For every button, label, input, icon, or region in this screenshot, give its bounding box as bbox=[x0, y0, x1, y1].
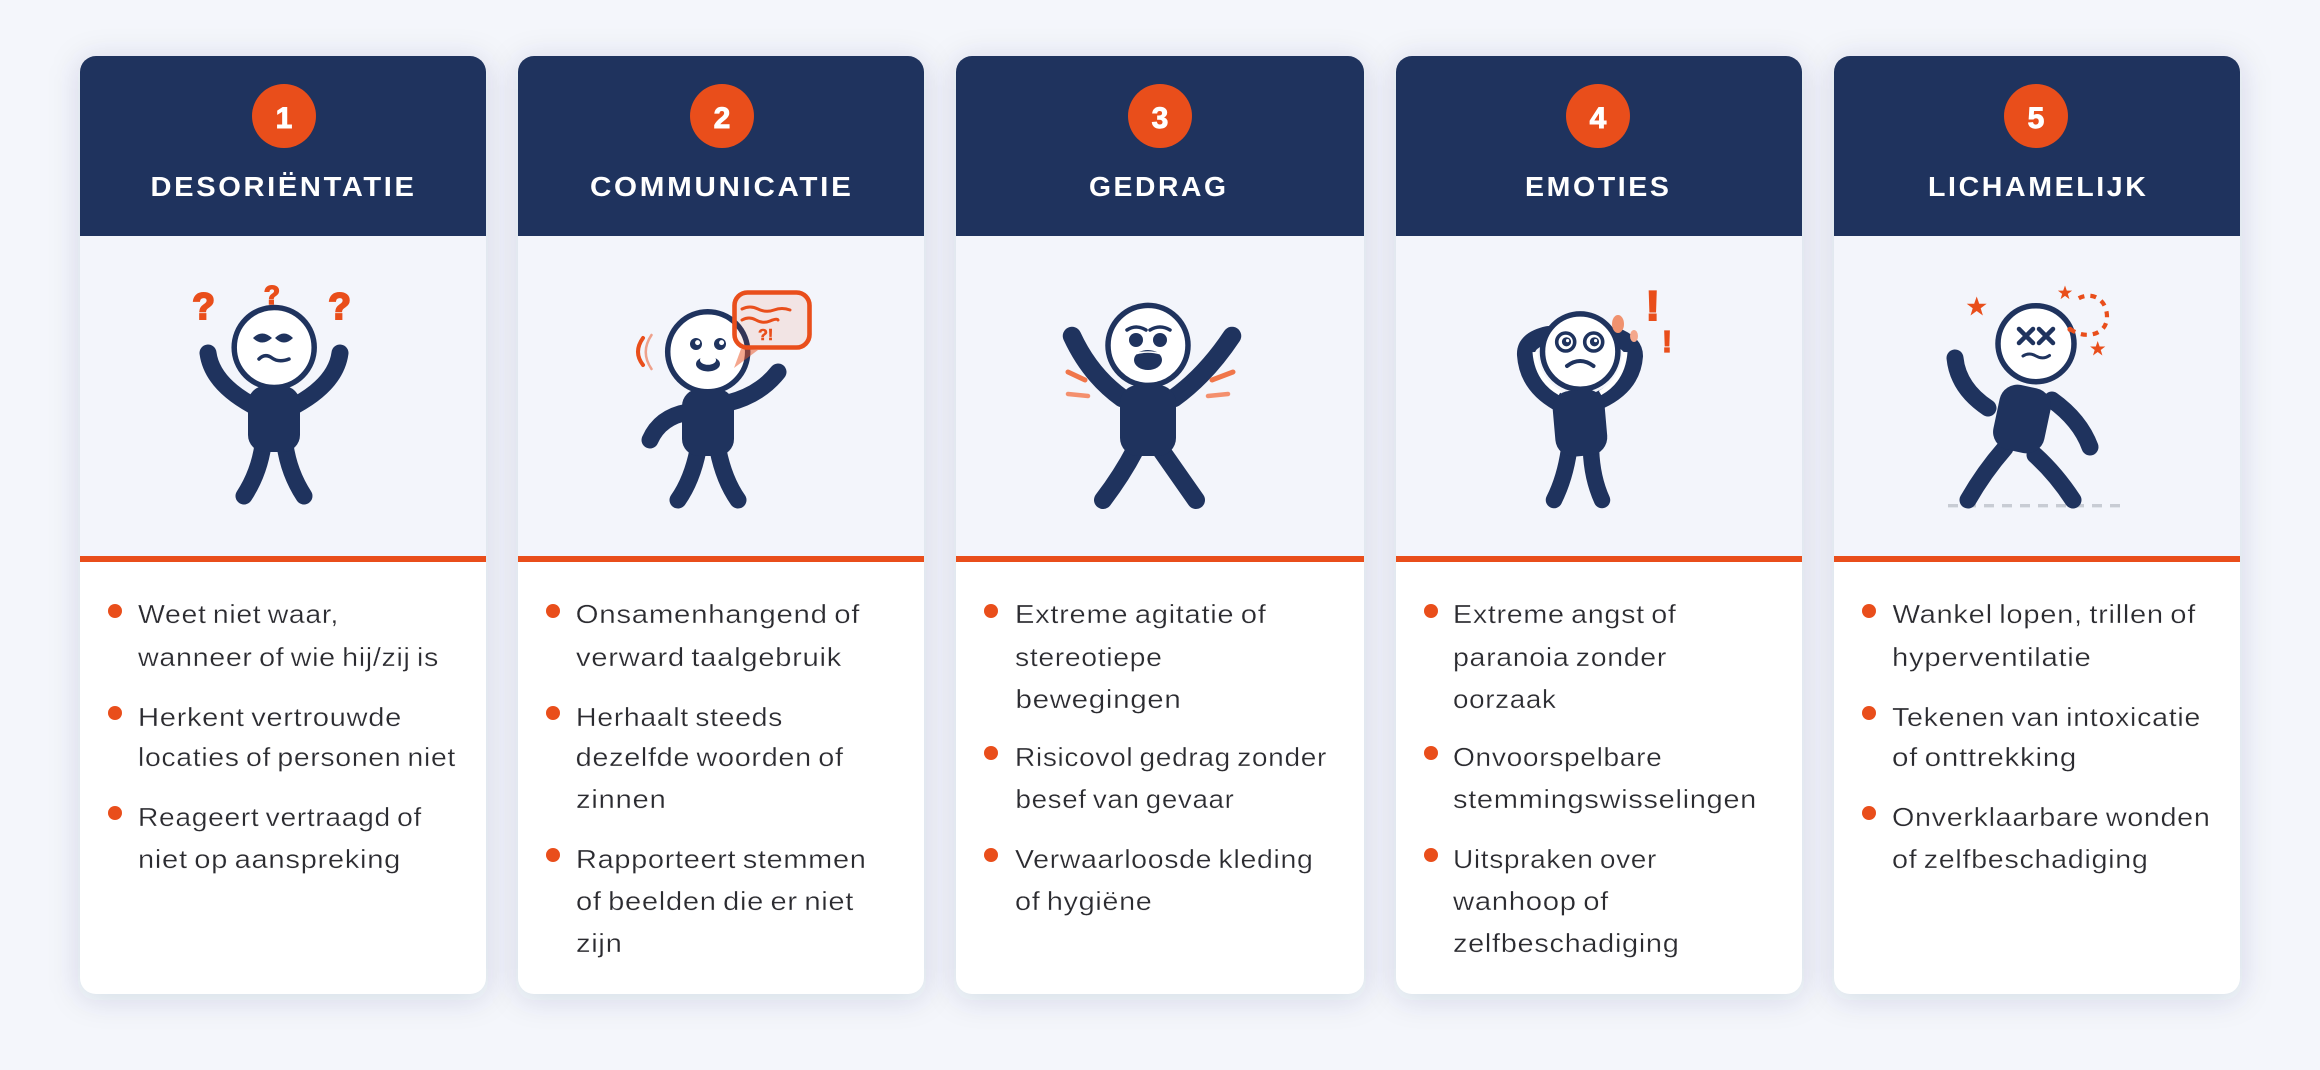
header band 3 bbox=[956, 56, 1364, 236]
bullet list 5: of zelfbeschadiging bbox=[1892, 844, 2148, 874]
bullet list 4 bbox=[1424, 599, 1757, 958]
bullet list 2: Herhaalt steeds bbox=[576, 702, 783, 732]
heading 4: EMOTIES bbox=[1525, 171, 1672, 202]
icon: confused figure with question marks: ? bbox=[264, 280, 280, 310]
bullet list 1: Herkent vertrouwde bbox=[138, 702, 402, 732]
icon: confused figure with question marks: ? bbox=[328, 286, 351, 327]
number badge 4: 4 bbox=[1590, 102, 1607, 135]
heading 3: GEDRAG bbox=[1089, 171, 1228, 202]
bullet list 2: Rapporteert stemmen bbox=[576, 844, 866, 874]
heading 2: COMMUNICATIE bbox=[590, 171, 854, 202]
heading 5: LICHAMELIJK bbox=[1928, 171, 2148, 202]
bullet list 3: stereotiepe bbox=[1015, 642, 1162, 672]
bullet list 2 bbox=[546, 599, 866, 958]
bullet list 3: Risicovol gedrag zonder bbox=[1015, 742, 1327, 772]
bullet list 3: of hygiëne bbox=[1015, 886, 1152, 916]
bullet list 5: of onttrekking bbox=[1892, 742, 2077, 772]
icon: talking figure with speech bubble: ?! bbox=[758, 327, 773, 344]
panel: 4 emoties bbox=[1394, 56, 1804, 1000]
number badge 3: 3 bbox=[1152, 102, 1168, 135]
number badge 3 bbox=[1128, 84, 1192, 148]
icon: anxious figure with hands on head bbox=[1526, 282, 1672, 500]
bullet list 3: besef van gevaar bbox=[1016, 784, 1234, 814]
heading 1: DESORIËNTATIE bbox=[150, 171, 416, 202]
icon: anxious figure with hands on head: ! bbox=[1662, 324, 1672, 359]
header band 2 bbox=[518, 56, 924, 236]
icon: agitated figure with raised arms bbox=[1068, 305, 1233, 500]
icon: dizzy staggering figure with stars bbox=[1948, 286, 2120, 506]
bullet list 3: Verwaarloosde kleding bbox=[1015, 844, 1314, 874]
panel: 3 gedrag bbox=[954, 56, 1366, 1000]
bullet list 1: Reageert vertraagd of bbox=[138, 802, 422, 832]
bullet list 2: dezelfde woorden of bbox=[576, 742, 844, 772]
bullet list 4: paranoia zonder bbox=[1453, 642, 1667, 672]
bullet list 4: Onvoorspelbare bbox=[1453, 742, 1662, 772]
bullet list 5: Tekenen van intoxicatie bbox=[1892, 702, 2201, 732]
bullet list 1: wanneer of wie hij/zij is bbox=[137, 642, 439, 672]
bullet list 4: oorzaak bbox=[1453, 684, 1557, 714]
bullet list 1: Weet niet waar, bbox=[138, 599, 339, 629]
header band 5 bbox=[1834, 56, 2240, 236]
bullet list 3: bewegingen bbox=[1016, 684, 1182, 714]
icon: confused figure with question marks: ? bbox=[192, 286, 215, 327]
bullet list 2: of beelden die er niet bbox=[576, 886, 854, 916]
header band 4 bbox=[1396, 56, 1802, 236]
bullet list 4: stemmingswisselingen bbox=[1453, 784, 1757, 814]
icon: confused figure with question marks bbox=[192, 280, 351, 496]
number badge 4 bbox=[1566, 84, 1630, 148]
number badge 2 bbox=[690, 84, 754, 148]
icon: anxious figure with hands on head: ! bbox=[1646, 282, 1660, 329]
bullet list 4: Extreme angst of bbox=[1453, 599, 1677, 629]
header band 1 bbox=[80, 56, 486, 236]
number badge 2: 2 bbox=[714, 102, 730, 135]
bullet list 2: zinnen bbox=[576, 784, 666, 814]
bullet list 4: wanhoop of bbox=[1452, 886, 1609, 916]
panel: 2 communicatie bbox=[516, 56, 926, 1000]
icon: talking figure with speech bubble bbox=[638, 292, 810, 500]
bullet list 5: Onverklaarbare wonden bbox=[1892, 802, 2210, 832]
number badge 5 bbox=[2004, 84, 2068, 148]
number badge 1: 1 bbox=[276, 102, 292, 135]
number badge 1 bbox=[252, 84, 316, 148]
bullet list 5: hyperventilatie bbox=[1892, 642, 2092, 672]
bullet list 2: verward taalgebruik bbox=[576, 642, 842, 672]
bullet list 4: zelfbeschadiging bbox=[1453, 928, 1680, 958]
bullet list 2: zijn bbox=[576, 928, 622, 958]
bullet list 1 bbox=[108, 599, 456, 874]
bullet list 1: niet op aanspreking bbox=[138, 844, 401, 874]
bullet list 4: Uitspraken over bbox=[1453, 844, 1657, 874]
bullet list 3 bbox=[984, 599, 1327, 916]
bullet list 3: Extreme agitatie of bbox=[1015, 599, 1267, 629]
panel: 1 desoriëntatie bbox=[78, 56, 488, 1000]
panel: 5 lichamelijk bbox=[1832, 56, 2242, 1000]
bullet list 5: Wankel lopen, trillen of bbox=[1892, 599, 2196, 629]
number badge 5: 5 bbox=[2028, 102, 2044, 135]
bullet list 1: locaties of personen niet bbox=[138, 742, 456, 772]
bullet list 5 bbox=[1862, 599, 2210, 874]
bullet list 2: Onsamenhangend of bbox=[576, 599, 860, 629]
